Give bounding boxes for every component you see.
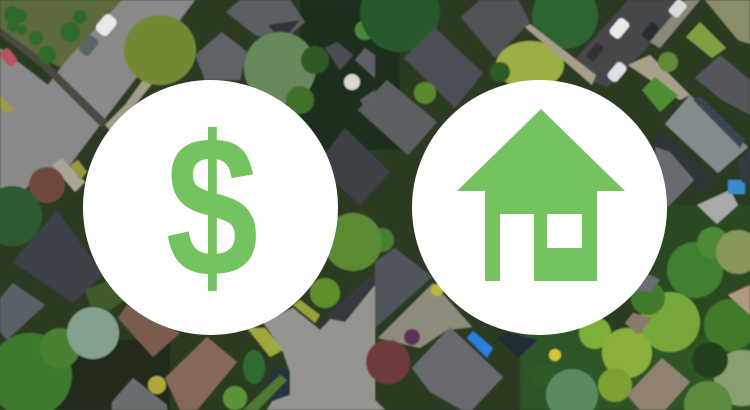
roof house centre [358, 80, 437, 155]
roof centre-left [195, 32, 247, 80]
yellow tree [496, 41, 564, 89]
bright bushes [414, 82, 436, 104]
lawns top right [686, 22, 726, 58]
road, bottom centre [263, 272, 385, 410]
big tree [0, 333, 72, 410]
solar panels [693, 96, 745, 148]
roof lower centre [324, 128, 390, 205]
large grey roof right [665, 95, 748, 173]
small brown roof [625, 313, 652, 335]
blue-green tree [67, 307, 119, 359]
grey roof bottom [112, 378, 167, 410]
lawn path block [628, 55, 690, 100]
road, top left [0, 0, 195, 190]
roof house left [13, 210, 103, 303]
road shadow [325, 270, 375, 322]
hedges [4, 6, 87, 64]
dark pine [532, 0, 598, 49]
blue pool right [728, 180, 745, 194]
icon: dollar sign: $ [166, 95, 258, 320]
roofs edge right [697, 190, 738, 224]
grey house bottom centre [412, 327, 503, 410]
dark roof upper right [695, 55, 750, 115]
corner lawn block, top left [0, 0, 122, 68]
brown roof lower [165, 337, 237, 410]
pale tree [244, 32, 316, 104]
roof shade [268, 20, 300, 42]
patio umbrella [344, 74, 360, 90]
tan roof lower right [627, 358, 690, 410]
left tree [0, 186, 42, 246]
sidewalk along road [105, 70, 155, 130]
road edge and far sidewalk [650, 0, 700, 48]
roof house top [461, 0, 530, 58]
small roofs [325, 42, 353, 70]
top right corner grass [705, 0, 750, 44]
panel: dollar circle [83, 80, 338, 335]
right side trees [528, 227, 750, 410]
yellow bush [148, 376, 166, 394]
tan sidewalk [525, 24, 596, 85]
tan roof right edge [728, 285, 750, 315]
pool [467, 331, 493, 358]
sidewalk left [52, 158, 85, 192]
red maple [366, 340, 410, 384]
darker tree canopy bands [300, 0, 400, 150]
brown roof [118, 305, 180, 357]
dark road right of circle, bottom centre [375, 248, 432, 328]
white cars on street [585, 0, 688, 84]
roof top centre [226, 0, 305, 42]
red-brown tree [29, 167, 65, 203]
cars top left [0, 12, 119, 68]
concrete forecourt [378, 283, 472, 348]
shadow under utility line [0, 28, 108, 128]
roof dark right edge [738, 150, 750, 185]
dark roof under circle [497, 332, 538, 358]
dark trees top [360, 0, 440, 52]
grey roof edge [635, 270, 660, 292]
dark street top right [572, 0, 685, 87]
trees near road [243, 350, 265, 384]
panel: house circle [412, 80, 667, 335]
lawn next to house [85, 280, 125, 310]
grass strips [247, 328, 283, 357]
grey house lower left [0, 283, 45, 340]
roof house dark [404, 28, 483, 108]
icon: house [457, 109, 625, 281]
grass patches left [70, 160, 87, 180]
green edge and trees by road [370, 228, 394, 252]
dark side, right [650, 130, 715, 195]
tree near road [124, 15, 196, 85]
grey roof middle right [655, 147, 694, 207]
